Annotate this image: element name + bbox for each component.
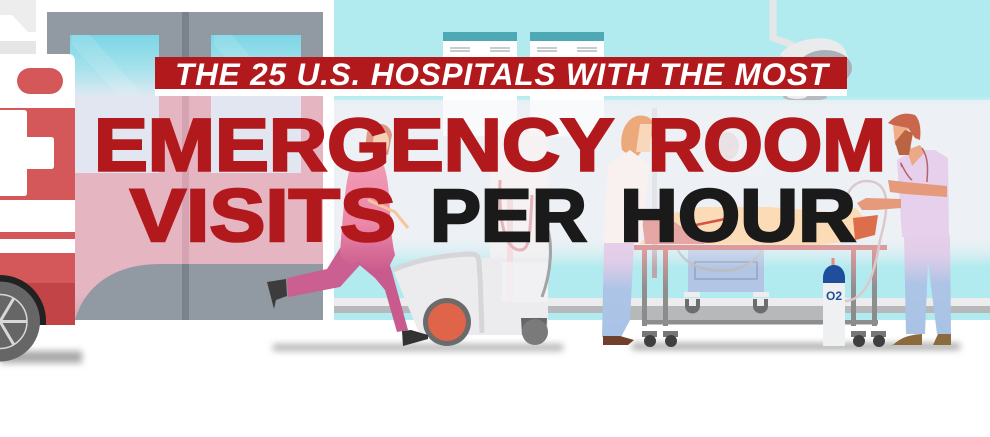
ambulance ground shadow <box>0 351 82 363</box>
building door <box>47 12 323 320</box>
title line two: VISITS <box>130 174 396 257</box>
subtitle text: THE 25 U.S. HOSPITALS WITH THE MOST <box>175 56 831 92</box>
title line one: ROOM <box>648 104 886 186</box>
large orange wheel <box>423 298 471 346</box>
doctor arms <box>857 180 947 210</box>
operating lamp <box>773 0 852 101</box>
ambulance window light <box>17 68 63 94</box>
portable x-ray machine <box>393 130 550 346</box>
doctor face <box>636 124 652 152</box>
faded lower part of wall charts <box>443 96 604 136</box>
hospital room wall <box>334 0 990 320</box>
doctor on the right <box>857 114 951 346</box>
nurse back leg <box>287 245 360 297</box>
nurse torso <box>340 162 395 275</box>
nurse running <box>267 124 428 346</box>
subtitle banner <box>155 56 847 96</box>
wheels of monitor cart <box>684 292 769 314</box>
wall charts <box>443 32 604 137</box>
doctor head and beard <box>888 114 925 166</box>
stretcher wheels <box>642 331 886 347</box>
nurse arm <box>368 200 408 228</box>
background bed monitor <box>652 108 766 292</box>
ambulance wheel <box>0 275 46 362</box>
stretcher with patient <box>634 207 887 347</box>
doctor shoes <box>603 336 634 345</box>
nurse front leg <box>356 240 408 332</box>
title line one <box>94 104 886 186</box>
ambulance <box>0 0 75 325</box>
doctor shoes <box>892 334 922 346</box>
ambulance red cross band <box>0 108 75 200</box>
doctor scrubs top <box>897 150 949 237</box>
nurse front shoe <box>402 330 428 346</box>
title line two: PER <box>430 174 587 257</box>
title line two <box>130 174 856 257</box>
title line one: EMERGENCY <box>94 104 614 186</box>
doctor trousers <box>904 235 951 334</box>
stethoscope <box>901 148 928 182</box>
doctor coat <box>603 150 650 245</box>
oxygen hose <box>845 181 886 301</box>
nurse back shoe <box>267 279 287 309</box>
oxygen tank label: O2 <box>826 289 842 303</box>
doctor trousers <box>602 243 634 337</box>
wall fade overlay <box>334 100 990 268</box>
oxygen tank <box>823 258 845 346</box>
doctor hair <box>621 115 653 160</box>
title line two: HOUR <box>620 174 856 257</box>
ambulance white cross <box>0 110 54 196</box>
ambulance stripes <box>0 232 75 325</box>
small cart wheel <box>522 319 548 345</box>
nurse hair and head <box>365 124 392 155</box>
floor shadows <box>273 343 960 351</box>
doctor on the left <box>602 115 653 345</box>
patient <box>640 207 878 245</box>
